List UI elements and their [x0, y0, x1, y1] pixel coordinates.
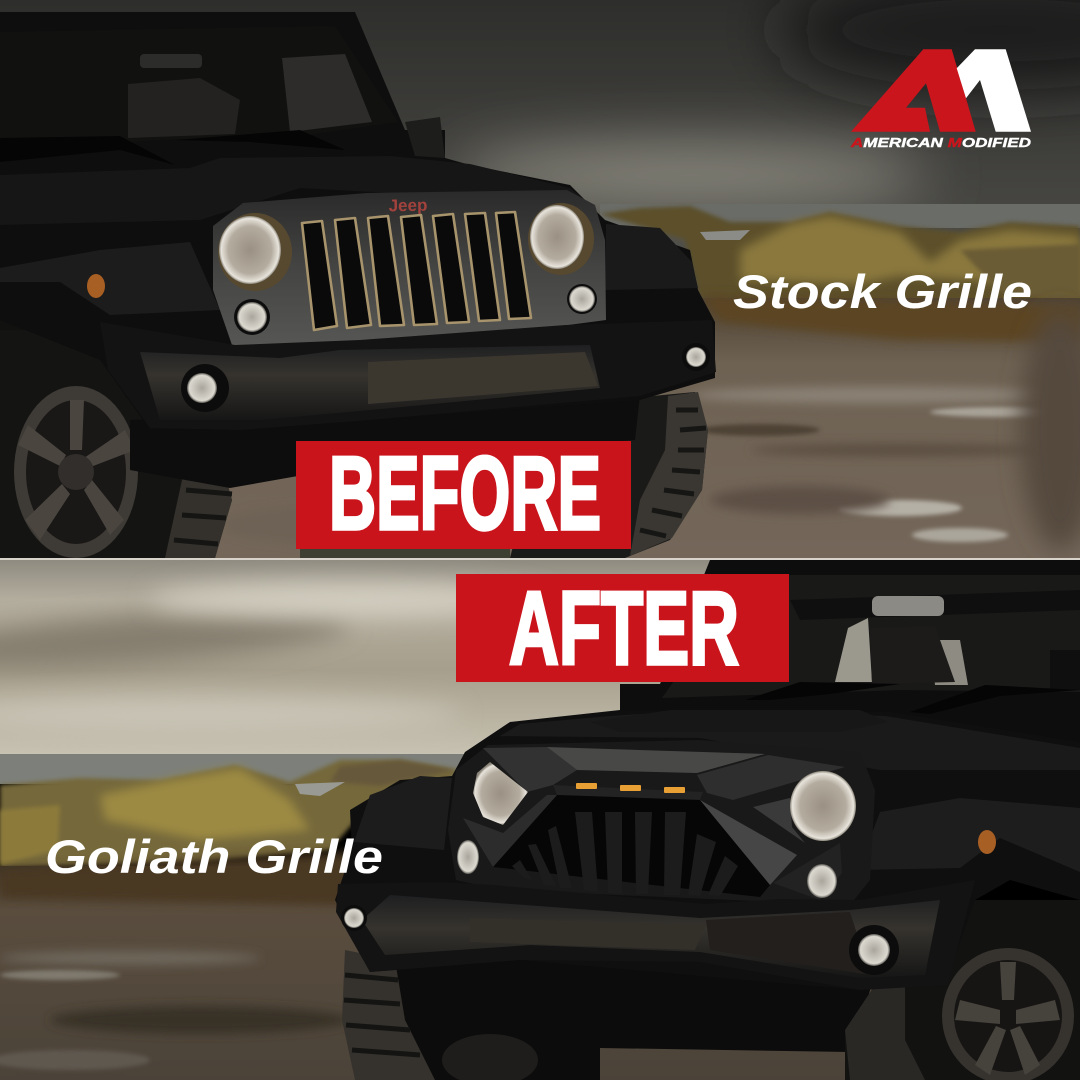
- body: [0, 12, 715, 430]
- sea horizon: [600, 204, 1080, 228]
- grille slats: [302, 212, 531, 330]
- left headlight: [473, 762, 528, 825]
- upper grille plates: [483, 747, 845, 800]
- right fender: [858, 798, 1080, 872]
- logo wordmark: AMERICAN M ODIFIED: [850, 135, 1032, 150]
- label: goliath grille: Goliath Grille: [45, 830, 383, 883]
- left fender: [354, 776, 452, 850]
- banner: after: AFTER: [509, 571, 739, 687]
- grille panel: [213, 190, 606, 345]
- right headlight: [528, 203, 594, 275]
- amber LED markers: [576, 783, 685, 793]
- rocky ground: [0, 852, 900, 1080]
- left front tire: [342, 950, 538, 1080]
- small round lamps: [457, 840, 837, 898]
- left fender: [0, 242, 220, 315]
- bumper: [336, 880, 975, 990]
- rocks: [0, 760, 460, 868]
- jeep: goliath: [335, 560, 1080, 1080]
- banner: before: BEFORE: [329, 436, 601, 552]
- grille mouth: [493, 795, 770, 897]
- right fender: [605, 224, 698, 290]
- right front tire: [510, 392, 708, 558]
- label: stock grille: Stock Grille: [733, 265, 1032, 318]
- small round lamps: [234, 284, 597, 335]
- right headlight: [790, 771, 856, 841]
- left headlight: [218, 213, 292, 291]
- panel: after scene: [0, 560, 1080, 1080]
- hood: [480, 710, 1080, 770]
- right tire and wheel: [845, 900, 1080, 1080]
- logo: american modified: [850, 49, 1032, 150]
- divider strip: [0, 558, 1080, 560]
- grille fins: [512, 812, 738, 896]
- amber side marker: [87, 274, 105, 298]
- sky background: [0, 0, 1080, 298]
- amber side marker: [978, 830, 996, 854]
- fog lights: [181, 343, 710, 412]
- rocky ground: [200, 295, 1080, 560]
- left tire and wheel: [0, 320, 232, 558]
- underbody shadow: [130, 395, 640, 488]
- logo mark: white M stroke: [957, 49, 1031, 132]
- rocks: [600, 206, 1080, 310]
- side mirror: [405, 117, 445, 158]
- jeep badge: Jeep: [388, 196, 428, 215]
- roof and windshield: [620, 560, 1080, 742]
- goliath grille housing: [448, 740, 875, 905]
- logo mark: red A: [851, 49, 976, 132]
- body: [335, 710, 1080, 990]
- sea horizon: [0, 754, 470, 784]
- grille angled arms: [463, 795, 842, 900]
- hood: [465, 164, 496, 170]
- fog lights: [341, 905, 899, 975]
- sky background: [0, 560, 710, 754]
- underbody shadow: [396, 960, 870, 1080]
- bumper: [232, 324, 716, 372]
- roof and windshield glass: [0, 54, 372, 164]
- panel: before scene: [0, 0, 1080, 560]
- banner: before: [296, 436, 631, 552]
- jeep: stock: [0, 12, 716, 558]
